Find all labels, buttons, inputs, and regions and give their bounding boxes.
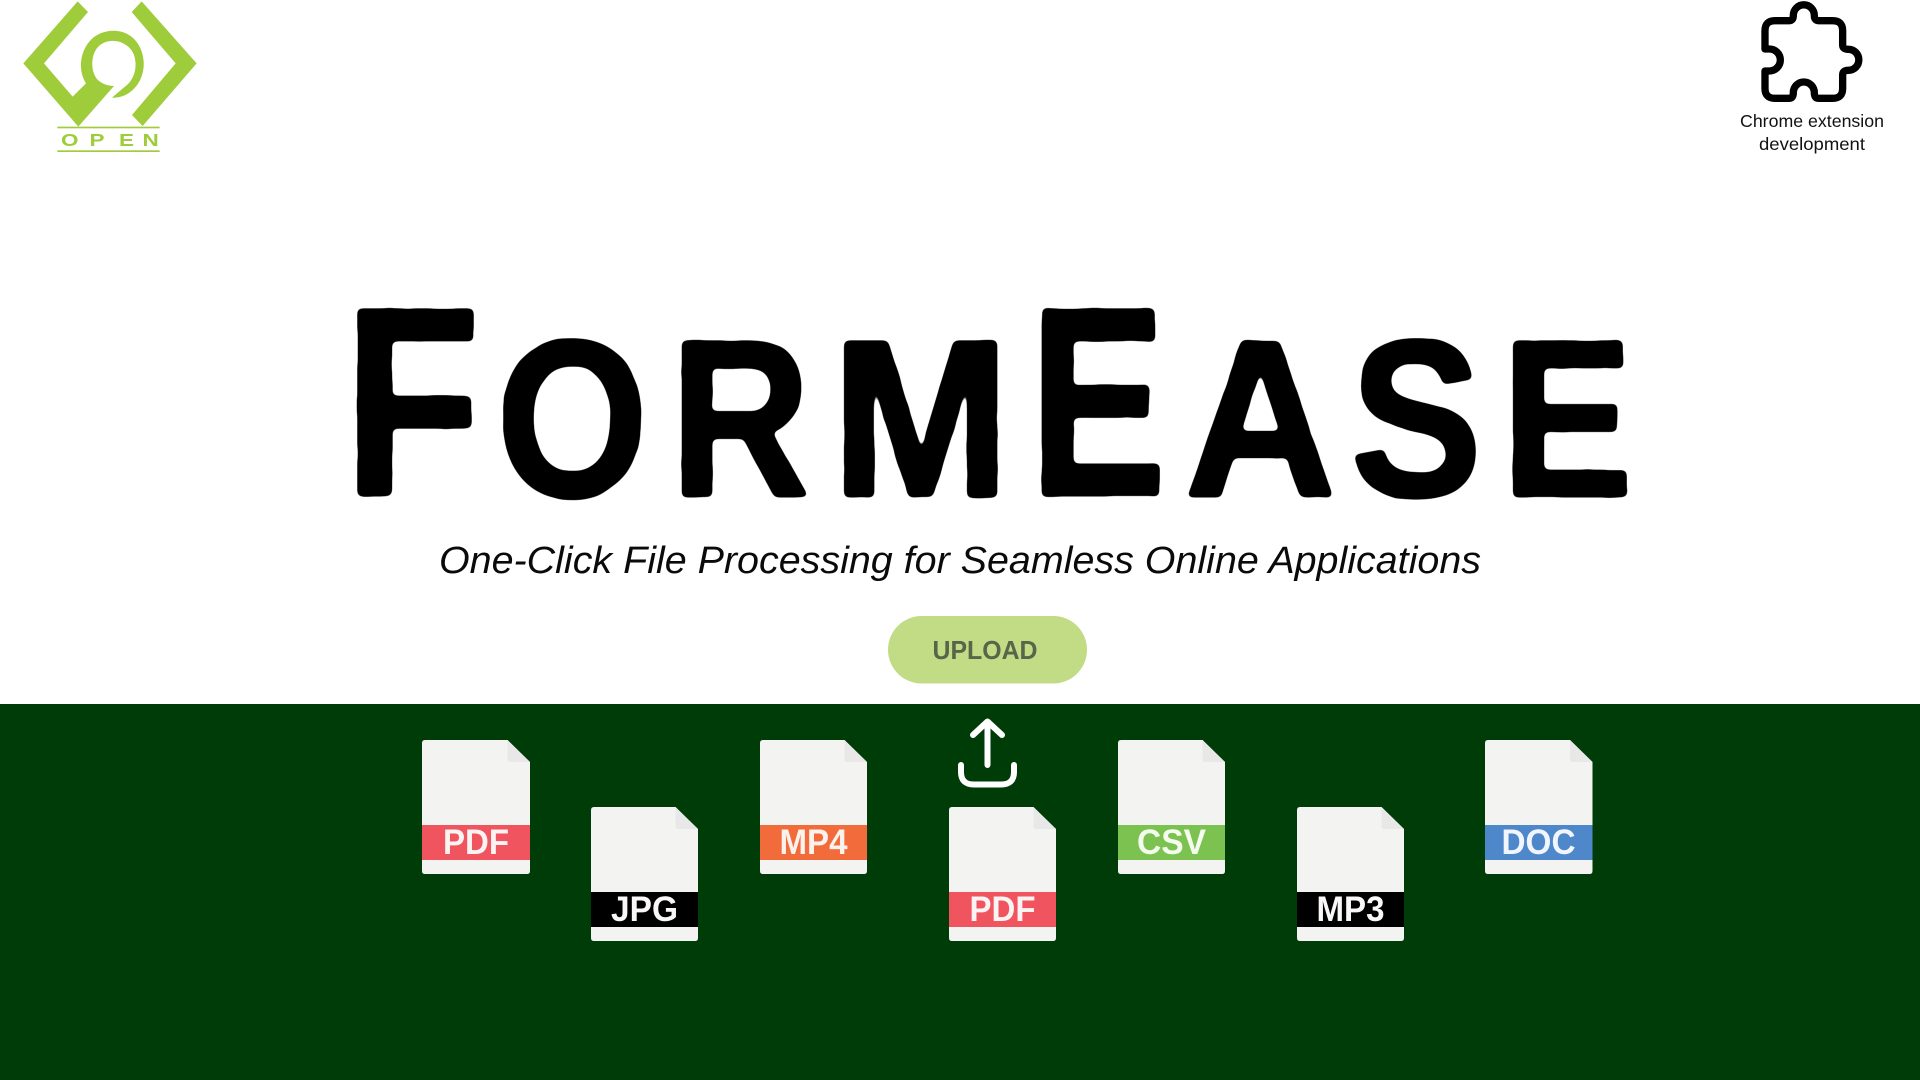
title: FormEase: O (496, 293, 648, 544)
text: Chrome extension development (1740, 111, 1884, 154)
icon: upload arrow (961, 722, 1014, 784)
icon: OPEN logo: OPEN (61, 131, 159, 150)
title: FormEase: E (1029, 251, 1166, 552)
file icon: MP4: MP4 (780, 822, 848, 862)
file icon: MP3: MP3 (1316, 889, 1384, 929)
text: Chrome extension development: development (1759, 134, 1865, 154)
file icon: CSV (1118, 740, 1225, 874)
file icon: JPG (591, 807, 698, 941)
file icon: DOC (1485, 740, 1592, 874)
title: FormEase: A (1184, 295, 1337, 544)
title: FormEase: S (1350, 294, 1482, 544)
file icon: PDF center: PDF (970, 889, 1036, 929)
title: FormEase: E (1501, 294, 1633, 544)
title: FormEase: M (831, 293, 1010, 544)
background: white upper area (0, 0, 1920, 704)
title: FormEase (344, 251, 1633, 553)
file icon: JPG: JPG (611, 889, 678, 929)
button: upload (888, 616, 1087, 684)
file icon: MP3 (1297, 807, 1404, 941)
subtitle: One-Click File Processing for Seamless Online Applications (439, 540, 1481, 582)
icon: OPEN logo (23, 1, 197, 152)
title: FormEase: R (670, 294, 811, 544)
icon: puzzle piece (1765, 5, 1859, 98)
file icon: PDF: PDF (443, 822, 509, 862)
button: upload: UPLOAD (932, 635, 1038, 665)
panel: dark green lower band (0, 704, 1920, 1080)
file icon: MP4 (760, 740, 867, 874)
text: Chrome extension development: Chrome extension (1740, 111, 1884, 131)
file icon: PDF center (949, 807, 1056, 941)
file icon: CSV: CSV (1137, 822, 1206, 862)
title: FormEase: F (344, 252, 481, 553)
file icon: DOC: DOC (1502, 822, 1576, 862)
file icon: PDF (422, 740, 530, 874)
